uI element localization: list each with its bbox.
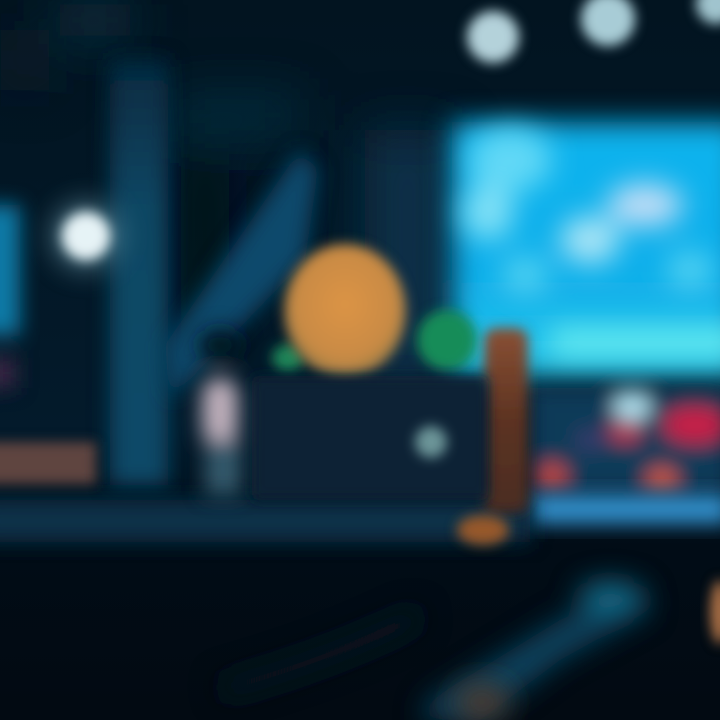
screen: map patches bbox=[462, 128, 720, 356]
foreground: teal streak bbox=[420, 581, 650, 720]
shelf: left brown stripe bbox=[0, 442, 96, 484]
object: dark box bbox=[252, 376, 488, 500]
object: brown case side bbox=[484, 328, 528, 513]
figure: orange ball head bbox=[284, 244, 406, 378]
desk gear: lower right equipment bbox=[530, 388, 720, 493]
object: small left figure bbox=[198, 329, 242, 495]
light: left round lamp bbox=[62, 212, 110, 260]
lights: top round lamps bbox=[467, 0, 720, 63]
foreground: brown reflection bbox=[454, 682, 510, 720]
structure: diagonal beam bbox=[165, 150, 318, 400]
screen: right world map bbox=[452, 122, 720, 377]
object: orange glow on desk bbox=[457, 515, 509, 545]
foreground: orange edge object bbox=[710, 580, 720, 644]
background: dim ceiling glow bbox=[0, 0, 450, 390]
structure: blue pillar bbox=[110, 60, 168, 485]
figure: green shapes bbox=[272, 310, 477, 372]
screen: left edge bbox=[0, 205, 20, 388]
foreground: faint arc bbox=[220, 615, 420, 690]
light: left lamp halo bbox=[52, 202, 120, 270]
desk: left surface band bbox=[0, 500, 530, 542]
desk: right surface bbox=[530, 494, 720, 524]
object: box button bbox=[415, 426, 447, 458]
